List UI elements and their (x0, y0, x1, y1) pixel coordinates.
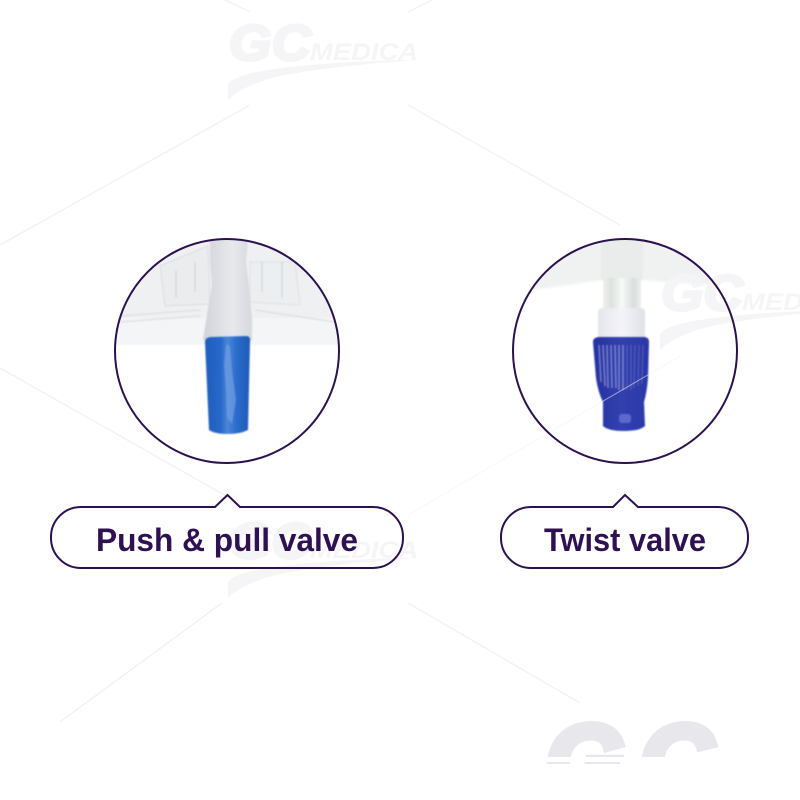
watermark logo: top (228, 15, 418, 100)
callout label (501, 495, 748, 568)
circle outline (513, 239, 737, 463)
panel: twist valve (500, 238, 800, 569)
bag film (534, 242, 710, 290)
knob tip (619, 414, 631, 423)
photo: push and pull valve (112, 238, 342, 434)
knob ribs, right side (627, 345, 643, 390)
plug highlights (224, 344, 236, 424)
watermark logo: bottom right, cropped (547, 721, 718, 764)
bag film (112, 238, 342, 345)
photo: twist valve (530, 238, 722, 431)
clear tube (603, 278, 641, 308)
circle outline (115, 239, 339, 463)
callout label (51, 495, 403, 568)
white stem (203, 238, 252, 340)
watermark diagonal lines (0, 0, 620, 722)
blue knob (593, 337, 649, 431)
upper clear neck (602, 279, 603, 280)
watermark line across twist valve (408, 355, 682, 515)
panel: push and pull valve (51, 238, 403, 568)
knob ribs (599, 345, 623, 390)
watermark logo: lower left (228, 513, 418, 598)
callout label: Push & pull valve (96, 522, 358, 558)
watermark logo: middle right (660, 265, 800, 350)
white collar (598, 308, 645, 340)
blue plug (205, 336, 250, 434)
callout label: Twist valve (544, 522, 706, 558)
